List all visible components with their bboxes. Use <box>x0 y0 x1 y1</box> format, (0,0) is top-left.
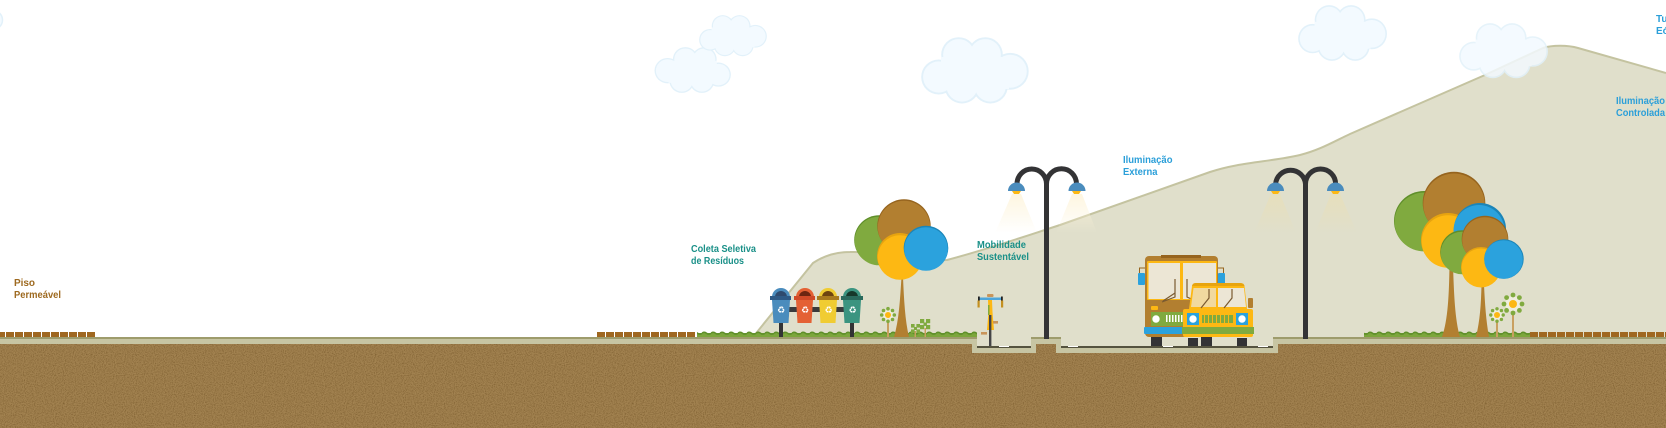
bin red: ♻ <box>801 306 809 316</box>
sidewalk band <box>0 337 1666 353</box>
road pit background <box>977 336 1031 347</box>
flower near tree 1 <box>880 307 896 337</box>
label: iluminação externa: Iluminação <box>1123 155 1172 166</box>
cloud 1 <box>655 47 731 93</box>
label: piso permeável: Permeável <box>14 290 61 301</box>
bin teal: ♻ <box>848 306 857 316</box>
grass strip left <box>697 331 977 337</box>
tree 2 large <box>1394 172 1506 337</box>
label: coleta seletiva <box>691 244 756 267</box>
label: mobilidade sustentável <box>977 240 1029 263</box>
bin blue: ♻ <box>777 306 785 316</box>
permeable pavers middle <box>597 332 695 337</box>
car <box>1182 283 1254 346</box>
flower large <box>1502 293 1524 337</box>
road surface <box>977 346 1273 348</box>
cloud 5 over hill <box>1459 23 1548 78</box>
tree 2 small <box>1440 216 1524 337</box>
small plants <box>911 319 930 337</box>
bicycle <box>978 294 1003 346</box>
flower small <box>1489 307 1505 337</box>
label: iluminação externa <box>1123 155 1172 178</box>
label: iluminação externa: Externa <box>1123 167 1158 178</box>
street lamp 2 <box>1254 169 1357 339</box>
cloud 4 <box>1298 5 1387 61</box>
street lamp 1 <box>995 169 1097 339</box>
cloud 2 <box>699 15 767 56</box>
label: coleta seletiva: Coleta Seletiva <box>691 244 756 255</box>
permeable pavers right <box>1530 332 1666 337</box>
soil ground <box>0 344 1666 428</box>
label: coleta seletiva: de Resíduos <box>691 256 744 267</box>
cloud 3 <box>921 37 1029 104</box>
label: piso permeável: Piso <box>14 278 35 289</box>
tree 1 <box>854 199 948 337</box>
label: iluminação controlada <box>1616 96 1665 119</box>
recycling bins <box>770 288 863 337</box>
hill background <box>753 46 1666 348</box>
label: mobilidade sustentável: Mobilidade <box>977 240 1026 251</box>
cloud far left <box>0 10 2 30</box>
grass strip right <box>1364 331 1530 337</box>
bin yellow: ♻ <box>824 306 833 316</box>
permeable pavers left <box>0 332 95 337</box>
label: mobilidade sustentável: Sustentável <box>977 252 1029 263</box>
label: turbinas eólicas <box>1656 14 1666 37</box>
bus <box>1138 255 1225 346</box>
label: piso permeável <box>14 278 61 301</box>
